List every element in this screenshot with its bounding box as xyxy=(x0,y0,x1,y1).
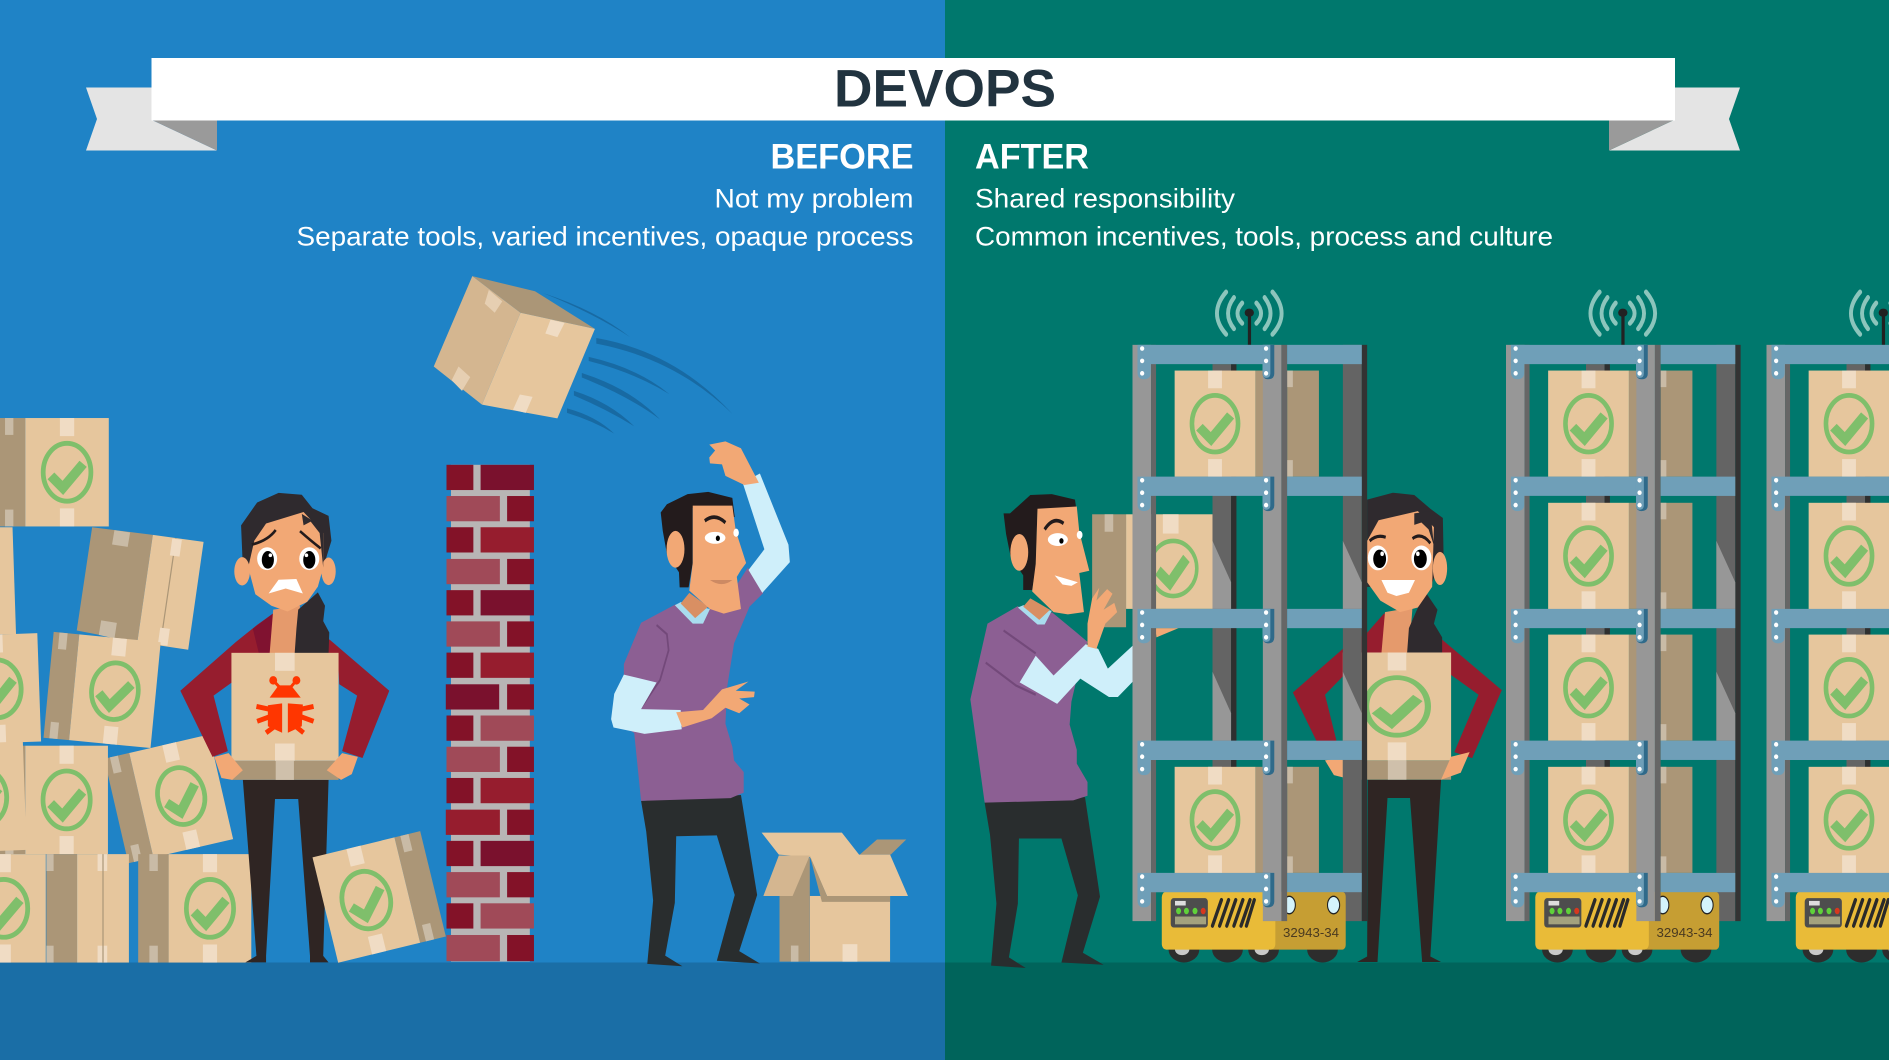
collar and neck xyxy=(1018,605,1052,624)
raised hand xyxy=(709,441,759,485)
lower hand xyxy=(676,682,755,727)
panel: after background xyxy=(945,0,1889,1060)
robot id: rack 1: 32943-34 xyxy=(1283,925,1339,940)
motion lines xyxy=(543,293,732,434)
character: smiling man xyxy=(970,494,1179,968)
pants xyxy=(641,795,760,966)
smile xyxy=(1381,580,1415,596)
box: bottom right tilted xyxy=(312,831,446,963)
eye xyxy=(705,517,739,544)
held box xyxy=(1343,652,1451,780)
text block: after: AFTER xyxy=(975,138,1089,176)
box pile xyxy=(0,418,251,963)
box: left edge middle xyxy=(0,633,41,745)
hair xyxy=(661,492,735,587)
rack 2 with robot xyxy=(1506,345,1741,962)
shirt fold xyxy=(641,625,669,708)
character: happy woman xyxy=(1293,493,1502,962)
ears xyxy=(234,557,250,585)
title: DEVOPS xyxy=(834,60,1056,118)
face xyxy=(248,512,323,612)
antenna: rack 2 xyxy=(1590,292,1655,345)
lower sleeve xyxy=(611,675,682,734)
box: top stack xyxy=(0,418,109,526)
title ribbon left tail xyxy=(86,88,217,150)
mouth xyxy=(269,579,303,594)
ear xyxy=(1433,552,1447,585)
box: lower straight xyxy=(0,746,108,854)
box: bottom second xyxy=(138,854,251,963)
shirt folds xyxy=(986,630,1036,695)
hair fringe xyxy=(1414,511,1434,546)
raised sleeve xyxy=(743,474,790,593)
box: tilted back xyxy=(0,527,204,650)
text block: before: BEFORE xyxy=(770,138,914,176)
eyes xyxy=(1368,536,1431,570)
hands xyxy=(1325,752,1470,780)
hair back xyxy=(241,493,331,567)
text block: after xyxy=(975,138,1553,252)
hair fringe xyxy=(302,514,323,567)
jacket xyxy=(180,613,389,758)
title banner xyxy=(152,58,1675,120)
text block: after: Shared responsibility xyxy=(975,184,1236,214)
mouth xyxy=(710,580,732,584)
face xyxy=(689,506,746,614)
held box xyxy=(231,653,339,780)
sleeve xyxy=(1020,643,1136,704)
flying box xyxy=(434,276,595,418)
pants xyxy=(243,780,329,962)
eyes xyxy=(257,547,319,570)
braid xyxy=(295,592,329,654)
shirt xyxy=(970,606,1087,803)
eyebrows xyxy=(252,530,321,548)
smile xyxy=(1055,575,1078,586)
box: lower left edge xyxy=(0,742,27,853)
face xyxy=(1032,506,1089,614)
open box xyxy=(762,833,908,962)
flying box with motion lines xyxy=(434,276,732,434)
hair xyxy=(1367,493,1444,587)
hair xyxy=(1004,494,1078,590)
floor: before xyxy=(0,962,945,1060)
box: bottom left xyxy=(0,854,129,963)
pants xyxy=(985,797,1104,968)
eye xyxy=(1045,521,1082,546)
text block: before: Separate tools, varied incentives, opaque process xyxy=(296,222,914,252)
text block: after: Common incentives, tools, process and culture xyxy=(975,222,1553,252)
box: lower tilted xyxy=(104,735,233,863)
antenna: rack 3 xyxy=(1851,292,1889,345)
text block: before: Not my problem xyxy=(714,184,914,214)
icon: bug xyxy=(256,676,314,733)
jacket xyxy=(1293,613,1502,758)
hand xyxy=(1087,588,1117,649)
chest xyxy=(1381,607,1412,653)
hands xyxy=(214,753,358,780)
brick wall xyxy=(446,465,534,962)
rack 1 with robot xyxy=(1132,345,1367,962)
text block: before xyxy=(296,138,914,252)
collar and chest xyxy=(253,613,273,654)
box: middle tilted xyxy=(43,632,161,748)
floor: after xyxy=(945,962,1889,1060)
ear xyxy=(1010,534,1028,571)
box held by man xyxy=(1092,514,1212,627)
robot id: rack 2: 32943-34 xyxy=(1656,925,1712,940)
collar and neck xyxy=(675,602,710,624)
braid xyxy=(1407,591,1442,652)
panel: before background xyxy=(0,0,945,1060)
shirt xyxy=(614,568,763,801)
character: worried woman xyxy=(180,493,389,962)
title ribbon right tail xyxy=(1609,88,1740,150)
antenna: rack 1 xyxy=(1217,292,1282,345)
pants xyxy=(1357,780,1441,962)
character: man throwing box xyxy=(611,441,790,966)
ear xyxy=(667,531,684,568)
face xyxy=(1367,511,1434,612)
rack 3 with robot xyxy=(1766,345,1889,962)
